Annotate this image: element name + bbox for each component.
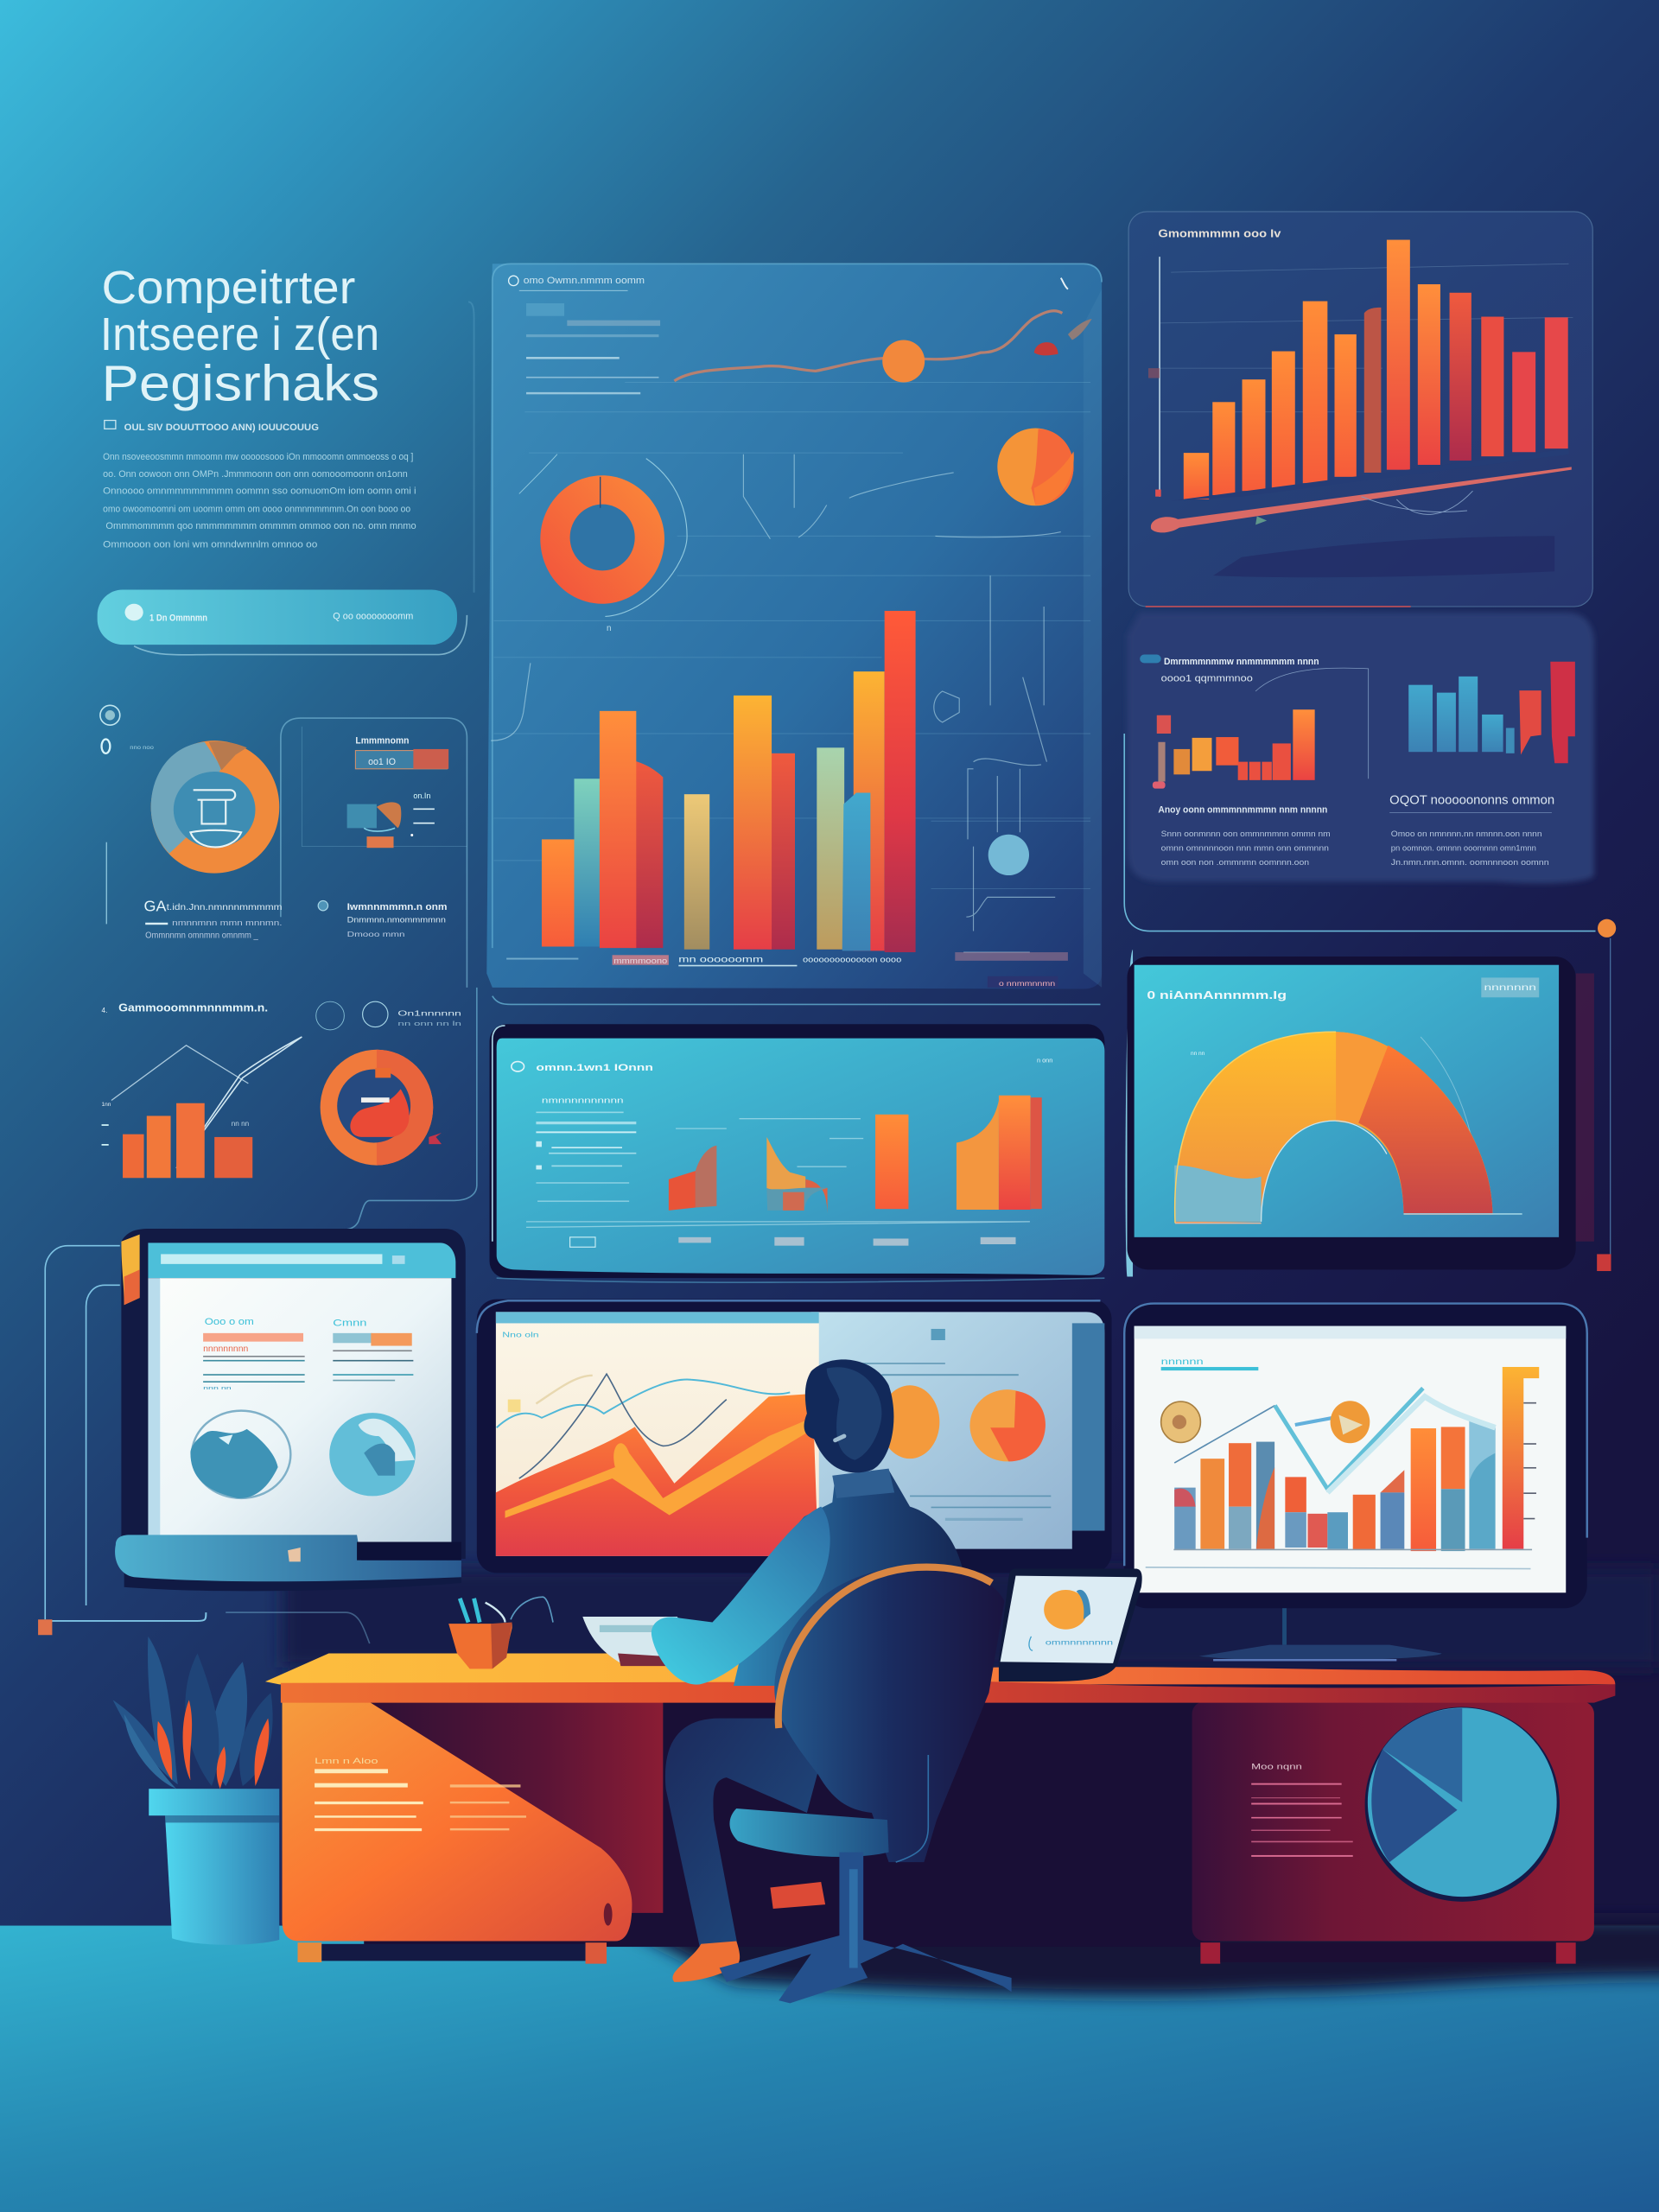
top right bar chart panel: [1128, 212, 1592, 607]
page text lines: [861, 1329, 1051, 1521]
dashboard heading: [512, 1056, 1052, 1202]
axis labels: [570, 1237, 1016, 1247]
bars: [1173, 1367, 1539, 1551]
chart title: [1140, 655, 1319, 684]
gauge chart: [1174, 1032, 1522, 1224]
small bar and line chart: 1nn: [102, 1102, 111, 1108]
wires: left connector lines: [45, 1246, 370, 1643]
plant: [113, 1637, 279, 1945]
floor: [0, 1918, 1659, 2212]
intro text block: OUL SIV DOUUTTOOO ANN) IOUUCOUUG: [124, 423, 319, 433]
head: [804, 1359, 893, 1472]
small bar and line chart: 4.: [102, 1007, 107, 1014]
monitor: center area chart: Nno oln: [502, 1332, 539, 1339]
pedestal text: [315, 1757, 526, 1831]
side data panel: [281, 718, 467, 988]
line series: [497, 1374, 790, 1478]
desk top: [265, 1653, 1615, 1703]
under desk dark area: [364, 1700, 1211, 1947]
panel footer labels: mn oooooomm: [678, 955, 763, 964]
gauge heading: nnnnnnn: [1484, 983, 1536, 993]
left description: Snnn oonmnnn oon ommnmmnn ommn nm: [1161, 830, 1331, 838]
orange bar chart: [1153, 668, 1369, 789]
right description: [1389, 794, 1554, 867]
side data panel: on.In: [413, 791, 430, 800]
pedestal text: Lmn n Aloo: [315, 1757, 378, 1765]
dashboard heading: n onn: [1037, 1056, 1052, 1064]
right description: Omoo on nmnnnn.nn nmnnn.oon nnnn: [1391, 830, 1542, 838]
screen header: [148, 1243, 455, 1278]
donut chart: n: [607, 624, 611, 633]
caption: left donut: [144, 898, 283, 941]
intro text block: oo. Onn oowoon onn OMPn .Jmmmoonn oon onn oomooomoonn on1onn: [103, 469, 408, 480]
arm: [652, 1507, 830, 1685]
left circle: [190, 1411, 290, 1498]
small pie chart: [997, 429, 1074, 505]
connector line: right with nodes: [1597, 919, 1616, 1271]
left description: omnn omnnnnoon nnn mmn onn ommnnn: [1161, 843, 1329, 852]
intro text block: Ommooon oon loni wm omndwmnlm omnoo oo: [103, 539, 317, 550]
right description: pn oomnon. omnnn ooomnnn omn1mnn: [1391, 843, 1536, 852]
column left text: nnn nn: [203, 1386, 232, 1391]
chart title: oooo1 qqmmmnoo: [1161, 674, 1253, 684]
caption: right data: [318, 900, 448, 938]
chart heading: Gmommmmn ooo Iv: [1158, 226, 1281, 239]
main dashboard panel: [486, 264, 1102, 988]
chart title: Dmrmmmnmmw nnmmmmmm nnnn: [1164, 657, 1319, 667]
donut chart with icon: nno noo: [130, 745, 154, 751]
bars: [1184, 240, 1568, 499]
intro text block: Ommmommmm qoo nmmmmmmm ommmm ommoo oon no. omn mnmo: [105, 521, 416, 531]
panel footer labels: o nnmmnnmn: [999, 980, 1055, 988]
gauge heading: [1147, 977, 1539, 1150]
office chair: [720, 1566, 1012, 2003]
intro text block: Onn nsoveeoosmmn mmoomn mw ooooosooo iOn mmooomn ommoeoss o oq ]: [103, 452, 413, 462]
connector line: upper left: [339, 988, 477, 1230]
panel footer labels: [506, 952, 1068, 988]
column right text: [333, 1319, 413, 1381]
node: orange square: [38, 1619, 52, 1635]
red block under chair: [770, 1882, 825, 1909]
panel heading: [509, 276, 645, 290]
text lines: [526, 303, 660, 394]
stem and base: [720, 1853, 1012, 2003]
intro text block: omo owoomoomni om uoomm omm om oooo onmnmmmmm.On oon booo oo: [103, 505, 410, 515]
caption: right data: Iwmnnmmmn.n onm: [347, 902, 448, 912]
left description: [1158, 804, 1331, 867]
button bar: 1 Dn Ommnmn: [149, 613, 207, 623]
monitor: right bar chart: nnnnnn: [1161, 1357, 1204, 1367]
monitor stand base: [115, 1535, 461, 1581]
column right text: Cmnn: [333, 1319, 367, 1329]
title: [100, 262, 379, 412]
panel footer labels: mmmmoono: [613, 957, 667, 965]
jacket: [734, 1469, 976, 1686]
page: [148, 1278, 161, 1541]
lower right panel with small charts: [1124, 613, 1596, 931]
monitor: dashboard with bars: [490, 1024, 1104, 1282]
left description: Anoy oonn ommmnnmmmn nnm nnnnn: [1158, 804, 1327, 815]
dashboard heading: nmnnnnnnnnnn: [542, 1096, 624, 1105]
dashboard heading: omnn.1wn1 IOnnn: [536, 1063, 653, 1073]
right circle: [329, 1413, 416, 1496]
cabinet text: [1251, 1762, 1353, 1857]
gauge heading: 0 niAnnAnnnmm.Ig: [1147, 988, 1287, 1001]
bar chart: [542, 611, 916, 952]
caption: left donut: t.idn.Jnn.nmnnnmmmmm: [167, 903, 283, 912]
caption: right data: Dmooo mmn: [347, 931, 405, 938]
column left text: nnnnnnnnn: [203, 1344, 248, 1354]
left desk pedestal: [283, 1699, 632, 1964]
caption: left donut: Ommnnmn omnmnn omnmm _: [145, 931, 258, 941]
right desk cabinet: [1192, 1701, 1594, 1964]
left description: omn oon non .ommnmn oomnnn.oon: [1161, 858, 1309, 867]
column left text: [203, 1317, 305, 1391]
small coin icons: [1161, 1401, 1370, 1443]
blue pie chart: [1365, 1707, 1560, 1902]
side data panel: oo1 IO: [368, 757, 396, 767]
orange ring icon: [316, 1001, 461, 1166]
monitor: left report: [115, 1229, 466, 1591]
title: Intseere i z(en: [100, 308, 379, 360]
column left text: Ooo o om: [205, 1317, 254, 1327]
person: [652, 1359, 1012, 2003]
legs: [665, 1719, 832, 1982]
bars: [669, 1096, 1042, 1213]
cream page: [496, 1312, 819, 1556]
button bar: [98, 589, 467, 655]
pot: [149, 1789, 279, 1945]
donut chart: [519, 454, 687, 633]
vertical separator line: [468, 302, 474, 593]
caption: left donut: GA: [144, 898, 166, 915]
donut chart with icon: [100, 705, 279, 924]
button bar: Q oo oooooooomm: [333, 612, 414, 622]
keyboard and papers: [582, 1617, 705, 1666]
dark wall shade behind desk: [283, 1569, 1659, 1668]
right description: OQOT nooooononns ommon: [1389, 794, 1554, 808]
caption: left donut: nmnnmnn mmn mnnmn.: [172, 918, 283, 927]
intro text block: Onnoooo omnmmmmmmmm oommn sso oomuomOm iom oomn omi i: [103, 486, 416, 496]
title: Compeitrter: [102, 262, 355, 314]
gauge heading: nn nn: [1191, 1051, 1205, 1057]
trend pointer: [1151, 467, 1572, 532]
title: Pegisrhaks: [102, 356, 379, 412]
blue and red bar chart: [1408, 662, 1575, 763]
laptop: [999, 1569, 1142, 1681]
orange ring icon: On1nnnnnn: [397, 1010, 461, 1018]
zigzag trend arrow: [1174, 1389, 1496, 1492]
annotation lines: [491, 454, 1061, 952]
line chart with markers: [674, 278, 1092, 382]
cup with pens: [448, 1597, 553, 1669]
monitor: right bar chart: [1124, 1304, 1587, 1608]
small bar and line chart: nn nn: [232, 1120, 249, 1128]
light blue dot: [988, 835, 1029, 875]
panel footer labels: ooooooooooooon oooo: [803, 955, 901, 963]
panel heading: omo Owmn.nmmm oomm: [524, 276, 645, 286]
small bar and line chart: Gammooomnmnnmmm.n.: [118, 1001, 268, 1014]
seat: [729, 1808, 889, 1857]
cabinet text: Moo nqnn: [1251, 1762, 1302, 1770]
area chart: [496, 1394, 818, 1556]
caption: right data: Dnmmnn.nmommmmnn: [347, 916, 446, 925]
monitor stand: [1199, 1608, 1442, 1661]
laptop: ommnnnnnnn: [1046, 1639, 1113, 1647]
side data panel: Lmmmnomn: [355, 735, 409, 746]
monitor: gauge chart: [1126, 950, 1594, 1277]
circle charts: [880, 1385, 1046, 1461]
monitor: center area chart: [477, 1300, 1112, 1573]
small bar and line chart: [102, 1001, 302, 1178]
right description: Jn.nmn.nnn.omnn. oomnnnoon oomnn: [1391, 858, 1549, 867]
blue-grey right page: [811, 1312, 1104, 1549]
intro text block: [103, 421, 416, 550]
orange ring icon: nn onn nn ln: [397, 1020, 461, 1027]
divider under main panel: [493, 996, 1100, 1004]
